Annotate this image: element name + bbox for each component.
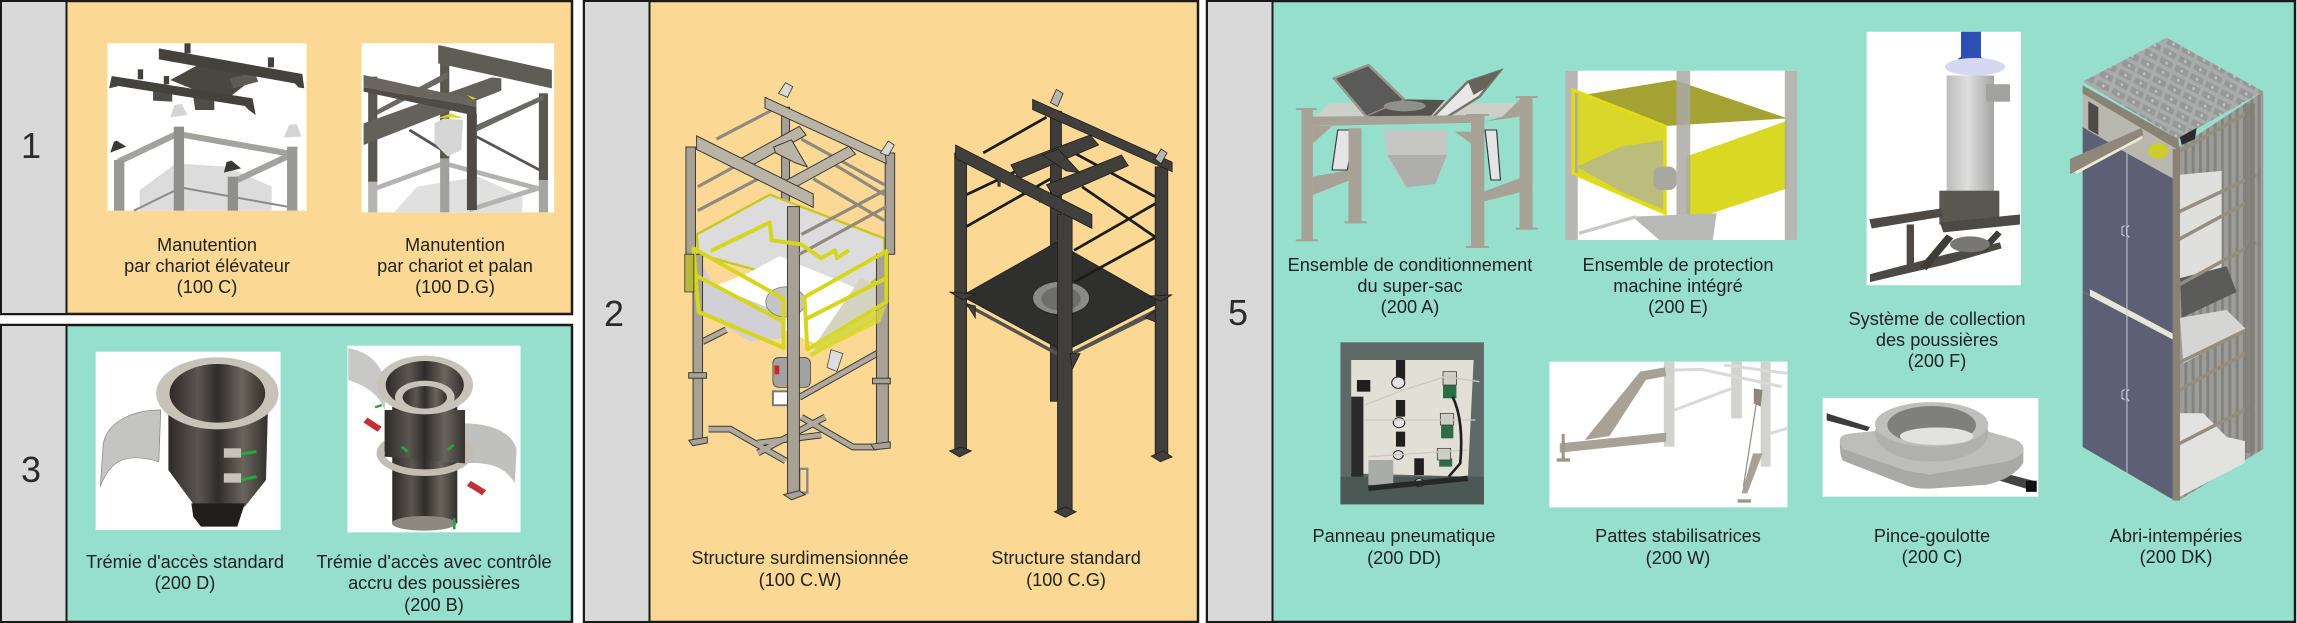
caption: trolley and hoist handling: Manutention	[405, 235, 505, 255]
image: standard access hopper	[96, 352, 281, 530]
caption: integrated machine guard assembly: Ensemble de protection	[1582, 255, 1774, 275]
caption: weather shelter: (200 DK)	[2140, 547, 2212, 567]
image: integrated machine guard assembly	[1565, 71, 1797, 240]
image: standard structure	[950, 89, 1172, 517]
caption: dust collection system: (200 F)	[1908, 351, 1966, 371]
caption: spout clamp: Pince-goulotte	[1874, 526, 1990, 546]
image: forklift handling	[108, 43, 307, 211]
image: spout clamp	[1823, 398, 2038, 497]
image: access hopper with enhanced dust control	[347, 346, 520, 532]
caption: forklift handling: Manutention	[157, 235, 257, 255]
caption: oversized structure: (100 C.W)	[759, 570, 841, 590]
caption: super-sack conditioning assembly: du super-sac	[1357, 276, 1463, 296]
caption: standard access hopper: Trémie d'accès standard	[86, 552, 284, 572]
caption: trolley and hoist handling: par chariot et palan	[377, 256, 533, 276]
number 2: 2	[604, 293, 624, 334]
image: weather shelter	[2070, 38, 2263, 501]
caption: stabilizer legs: (200 W)	[1646, 548, 1710, 568]
caption: pneumatic panel: Panneau pneumatique	[1312, 526, 1496, 546]
image: oversized structure	[685, 83, 895, 500]
caption: standard structure: (100 C.G)	[1026, 570, 1106, 590]
image: dust collection system	[1867, 32, 2021, 285]
caption: oversized structure: Structure surdimensionnée	[691, 548, 909, 568]
caption: dust collection system: Système de collection	[1849, 309, 2025, 329]
caption: integrated machine guard assembly: machine intégré	[1613, 276, 1743, 296]
caption: forklift handling: par chariot élévateur	[124, 256, 290, 276]
caption: super-sack conditioning assembly: Ensemble de conditionnement	[1288, 255, 1532, 275]
image: trolley and hoist handling	[362, 43, 554, 212]
caption: standard access hopper: (200 D)	[155, 573, 215, 593]
panel 2: structures	[584, 1, 1198, 622]
caption: super-sack conditioning assembly: (200 A)	[1381, 297, 1439, 317]
caption: standard structure: Structure standard	[991, 548, 1141, 568]
caption: access hopper with enhanced dust control: Trémie d'accès avec contrôle	[316, 552, 552, 572]
image: stabilizer legs	[1549, 362, 1787, 507]
panel 1: handling	[1, 1, 572, 314]
panel 3: access hoppers	[1, 325, 572, 622]
caption: trolley and hoist handling: (100 D.G)	[415, 277, 495, 297]
caption: weather shelter: Abri-intempéries	[2110, 526, 2242, 546]
number 1: 1	[21, 125, 41, 166]
caption: access hopper with enhanced dust control: (200 B)	[404, 595, 464, 615]
number 5: 5	[1228, 292, 1248, 333]
number 3: 3	[21, 449, 41, 490]
caption: dust collection system: des poussières	[1876, 330, 1998, 350]
panel 5: accessories	[1207, 1, 2295, 622]
caption: access hopper with enhanced dust control: accru des poussières	[348, 573, 520, 593]
image: super-sack conditioning assembly	[1296, 65, 1538, 248]
caption: integrated machine guard assembly: (200 E)	[1648, 297, 1708, 317]
caption: pneumatic panel: (200 DD)	[1367, 548, 1441, 568]
image: pneumatic panel	[1340, 342, 1484, 504]
caption: forklift handling: (100 C)	[177, 277, 237, 297]
caption: spout clamp: (200 C)	[1902, 547, 1962, 567]
caption: stabilizer legs: Pattes stabilisatrices	[1595, 526, 1761, 546]
